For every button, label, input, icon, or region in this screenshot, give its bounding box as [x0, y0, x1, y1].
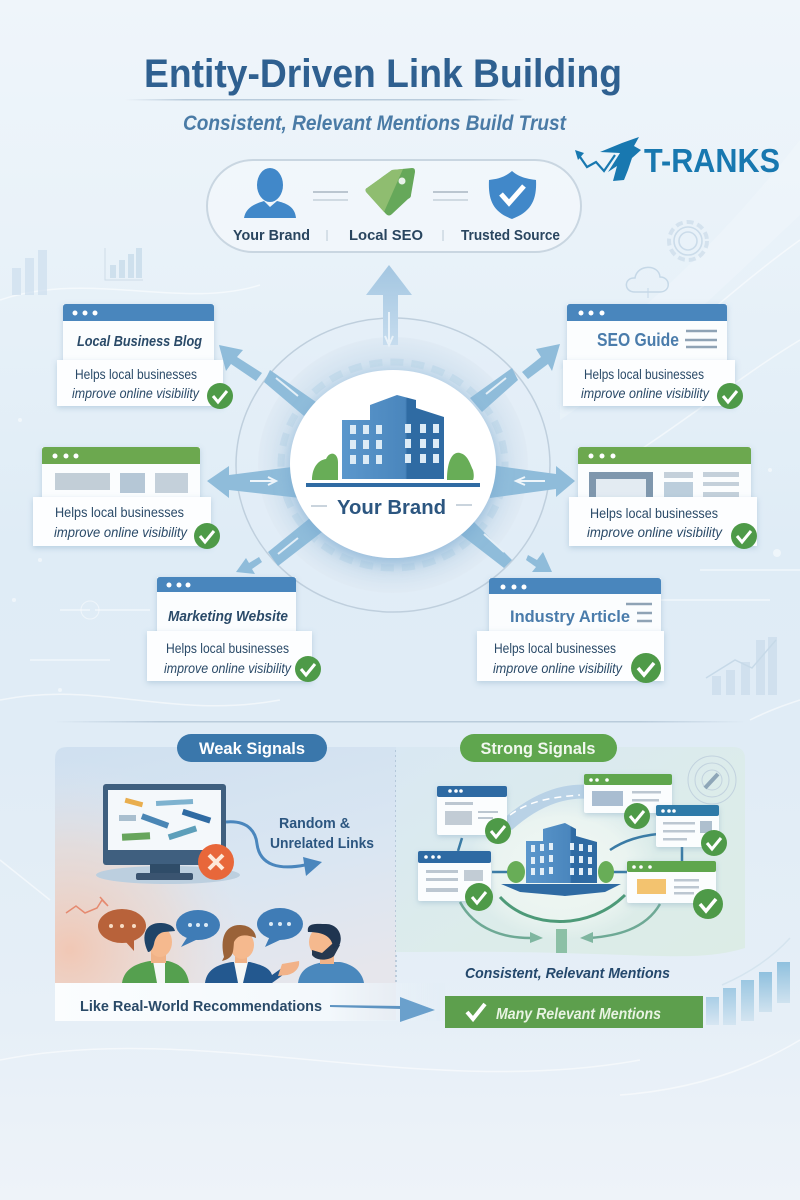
labels: Trusted Source: [461, 227, 560, 244]
card: left green page: improve online visibility: [54, 525, 188, 540]
card: Local Business Blog: Local Business Blog: [77, 333, 202, 350]
arrow: left: [207, 466, 300, 498]
icon: check: [295, 656, 321, 682]
mini card: blue right: [656, 805, 727, 856]
band: recommendations: Like Real-World Recommendations: [80, 998, 322, 1015]
card: Marketing Website: Helps local businesses: [166, 641, 289, 656]
card: right green page: improve online visibility: [587, 525, 723, 540]
icon: shield: [489, 171, 536, 219]
bar chart: growth: [706, 938, 790, 1025]
icon: satellite: [688, 756, 736, 804]
subtitle: Consistent, Relevant Mentions Build Trust: [183, 112, 567, 135]
icon: check: [631, 653, 661, 683]
speech bubble: blue right: [257, 908, 303, 947]
pill: weak signals: Weak Signals: [199, 739, 305, 758]
pill: strong signals: Strong Signals: [480, 739, 596, 758]
person: woman in navy: [205, 925, 299, 983]
card: Local Business Blog: improve online visibility: [72, 386, 200, 401]
card: Marketing Website: improve online visibility: [164, 661, 292, 676]
card: Local Business Blog: [57, 304, 233, 409]
logo: T-RANKS: T-RANKS: [644, 142, 780, 179]
icon: x mark: [198, 844, 234, 880]
icon: tag: [366, 168, 415, 216]
panel: weak signals: [55, 734, 445, 1022]
icon: check: [717, 383, 743, 409]
card: Industry Article: Industry Article: [510, 607, 630, 626]
title: Entity-Driven Link Building: [144, 52, 622, 96]
small line chart: [66, 897, 108, 913]
card: left green page: [33, 447, 220, 549]
mini card: blue left: [418, 851, 493, 911]
label: consistent relevant mentions: Consistent, Relevant Mentions: [465, 965, 670, 982]
card: SEO Guide: SEO Guide: [597, 330, 679, 350]
label: random links: Random &: [279, 816, 351, 832]
labels: [233, 227, 560, 244]
card: Marketing Website: [147, 577, 321, 682]
card: SEO Guide: Helps local businesses: [584, 367, 704, 382]
card: Industry Article: improve online visibility: [493, 661, 623, 676]
person: man in green: [122, 923, 189, 983]
icon: building: [306, 395, 480, 487]
card: right green page: [569, 447, 757, 549]
speech bubble: blue left: [176, 910, 220, 947]
card: Marketing Website: Marketing Website: [168, 608, 288, 625]
arrow: to strong: [330, 997, 435, 1022]
labels: Local SEO: [349, 227, 423, 244]
icon: monitor: [96, 784, 240, 884]
decorative background icons: [12, 222, 777, 695]
card: Industry Article: Helps local businesses: [494, 641, 616, 656]
arrow: upper left: [219, 345, 316, 416]
arrow: upper right: [470, 344, 560, 412]
label: random links: Unrelated Links: [270, 836, 374, 852]
card: SEO Guide: [563, 304, 743, 409]
icon: check: [207, 383, 233, 409]
hub: central brand circle: [207, 265, 575, 612]
people: [98, 908, 364, 983]
card: SEO Guide: improve online visibility: [581, 386, 710, 401]
mini card: blue top left: [437, 786, 511, 844]
mini card: green right: [627, 861, 723, 919]
band: recommendations: [55, 983, 445, 1022]
banner: many relevant mentions: [445, 996, 703, 1028]
labels: Your Brand: [233, 227, 310, 244]
label: your brand: Your Brand: [337, 497, 446, 519]
card: Industry Article: [477, 578, 664, 683]
icon: check: [194, 523, 220, 549]
panel: strong signals: [396, 734, 745, 956]
arrow: lower left: [236, 518, 322, 574]
pill: weak signals: [177, 734, 327, 762]
arrow: lower right: [460, 520, 552, 572]
arrow: right: [490, 465, 575, 498]
icon: building: [501, 823, 621, 896]
network connectors: [458, 792, 682, 938]
arrow: links curve: [226, 822, 322, 876]
card: right green page: Helps local businesses: [590, 506, 718, 521]
label: random links: [270, 816, 374, 852]
center circle: [290, 370, 496, 558]
logo: T-RANKS: [575, 137, 780, 181]
icon: check: [731, 523, 757, 549]
arrow: up to pill: [366, 265, 412, 345]
mini card: green top: [584, 774, 672, 829]
card: Local Business Blog: Helps local businesses: [75, 367, 197, 382]
banner: many relevant mentions: Many Relevant Mentions: [496, 1006, 661, 1023]
card: left green page: Helps local businesses: [55, 505, 184, 520]
speech bubble: orange: [98, 909, 146, 951]
icon: person: [244, 168, 296, 218]
pill: strong signals: [460, 734, 617, 762]
panel: entity pill: [207, 160, 581, 252]
person: bearded man: [298, 924, 364, 983]
